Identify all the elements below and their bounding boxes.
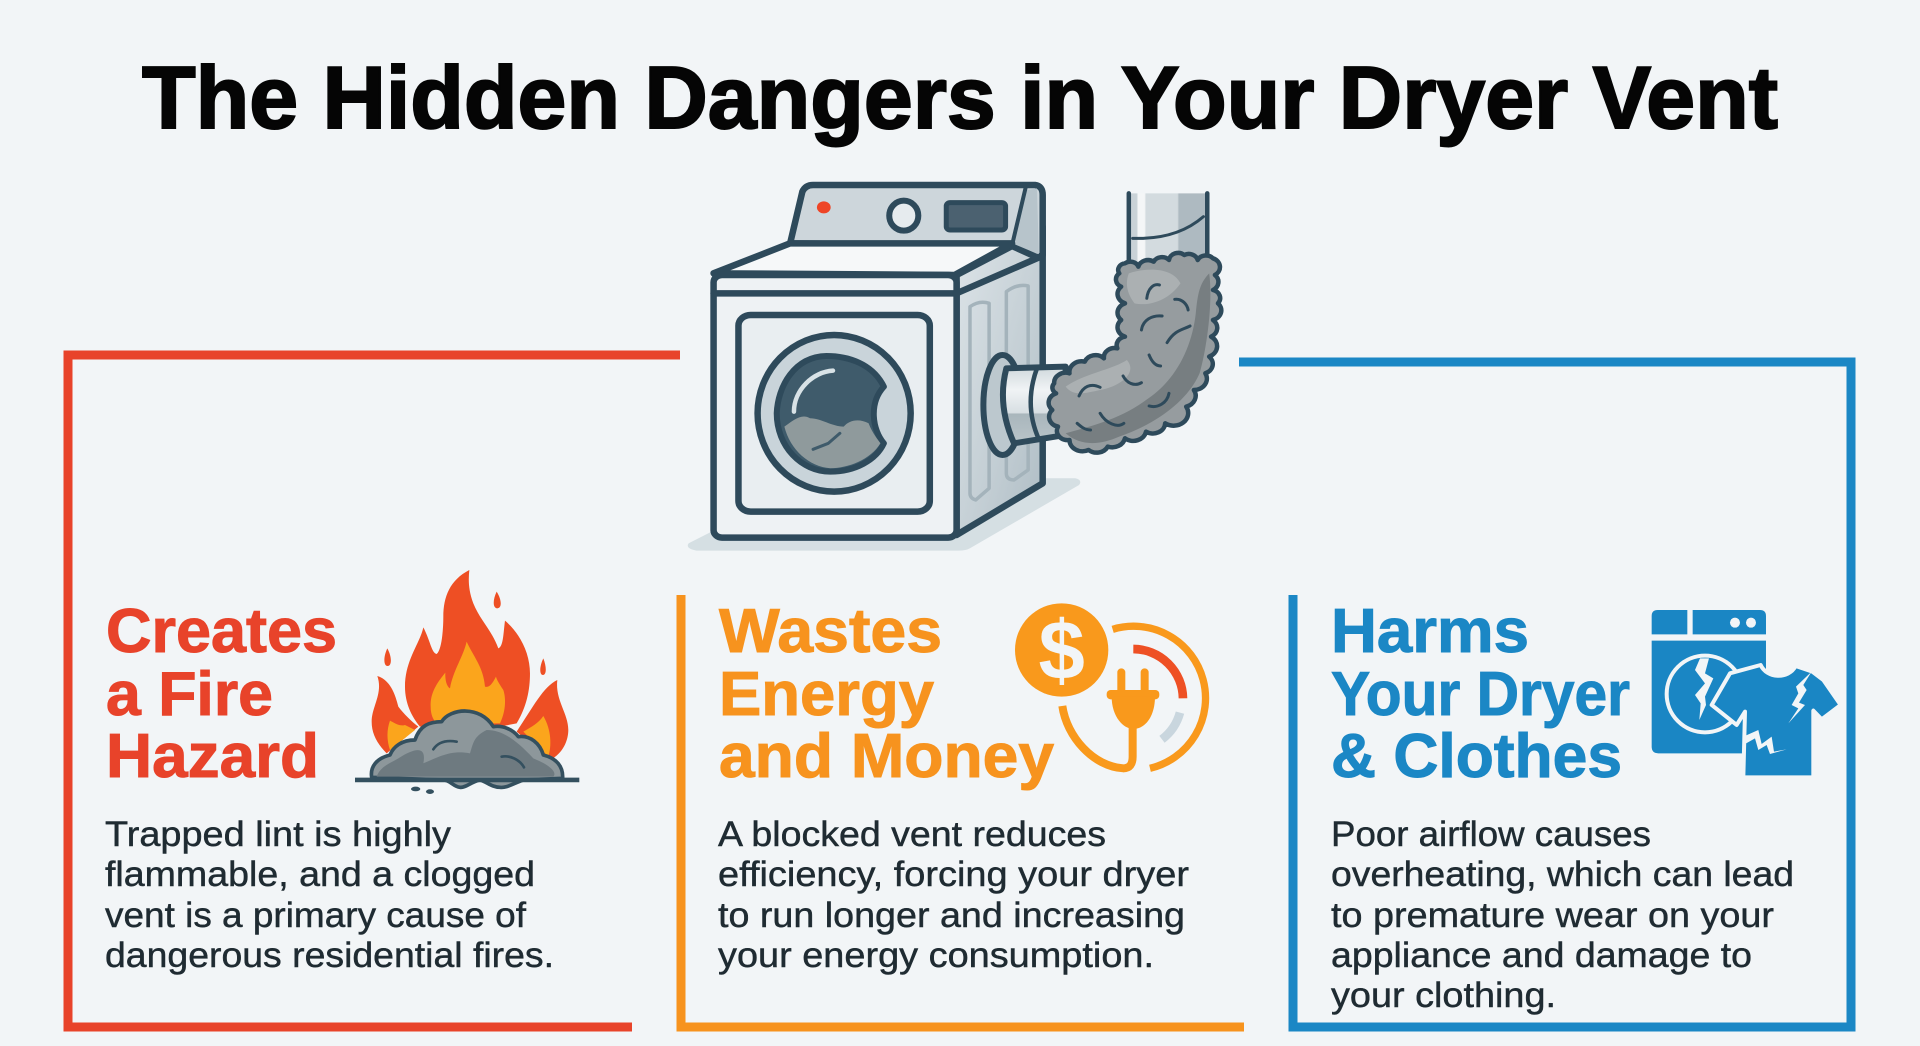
vent connector xyxy=(983,355,1022,455)
text: fire hazard description: vent is a primary cause of xyxy=(105,896,526,935)
panel: dryer damage border xyxy=(1239,362,1851,1027)
heading: harms dryer: Your Dryer xyxy=(1331,660,1630,729)
text: dryer damage description: your clothing. xyxy=(1331,976,1556,1015)
heading: fire hazard: Hazard xyxy=(106,722,319,791)
text: dryer damage description: overheating, which can lead xyxy=(1331,855,1794,894)
text: dryer damage description xyxy=(1331,815,1794,1015)
control console xyxy=(790,185,1043,257)
text: energy description: to run longer and increasing xyxy=(718,896,1185,935)
text: dryer damage description: to premature wear on your xyxy=(1331,896,1774,935)
heading: wastes energy: Wastes xyxy=(719,597,942,666)
door panel xyxy=(738,315,930,512)
floor shadow xyxy=(688,478,1080,551)
display screen xyxy=(946,203,1006,230)
heading: wastes energy: and Money xyxy=(719,722,1055,791)
heading: fire hazard xyxy=(106,597,337,791)
heading: harms dryer xyxy=(1331,597,1630,791)
text: energy description: A blocked vent reduces xyxy=(718,815,1106,854)
control knob xyxy=(889,201,918,231)
lint clog xyxy=(1049,253,1221,453)
text: energy description: your energy consumption. xyxy=(718,936,1154,975)
icon: flames on lint pile xyxy=(355,570,579,794)
heading: fire hazard: a Fire xyxy=(106,660,273,729)
icon: dollar coin and plug xyxy=(1015,603,1206,768)
dryer top xyxy=(714,243,1012,275)
title: The Hidden Dangers in Your Dryer Vent xyxy=(142,48,1778,147)
heading: wastes energy xyxy=(719,597,1055,791)
text: energy description: efficiency, forcing your dryer xyxy=(718,855,1189,894)
panel: energy border xyxy=(681,595,1244,1027)
heading: harms dryer: Harms xyxy=(1331,597,1529,666)
panel: wastes energy and money xyxy=(718,597,1206,975)
text: fire hazard description: flammable, and a clogged xyxy=(105,855,535,894)
lint in drum xyxy=(784,417,880,468)
text: fire hazard description: Trapped lint is highly xyxy=(105,815,452,854)
dryer front xyxy=(714,275,957,538)
text: dryer damage description: appliance and damage to xyxy=(1331,936,1752,975)
text: dryer damage description: Poor airflow causes xyxy=(1331,815,1651,854)
text: fire hazard description xyxy=(105,815,554,975)
icon: dollar coin and plug: $ xyxy=(1038,604,1085,697)
text: fire hazard description: dangerous residential fires. xyxy=(105,936,554,975)
illustration: dryer with lint-clogged vent xyxy=(688,185,1221,551)
heading: harms dryer: & Clothes xyxy=(1331,722,1622,791)
text: energy description xyxy=(718,815,1189,975)
panel: harms your dryer and clothes xyxy=(1331,597,1841,1015)
door window xyxy=(777,356,884,472)
heading: wastes energy: Energy xyxy=(719,660,935,729)
heading: fire hazard: Creates xyxy=(106,597,337,666)
vertical duct xyxy=(1129,193,1207,267)
dryer side xyxy=(957,227,1043,535)
indicator light xyxy=(817,201,831,213)
panel: fire hazard border xyxy=(68,355,680,1027)
icon: damaged dryer and torn shirt xyxy=(1652,610,1841,777)
panel: creates a fire hazard xyxy=(105,570,579,975)
door ring xyxy=(758,335,911,492)
